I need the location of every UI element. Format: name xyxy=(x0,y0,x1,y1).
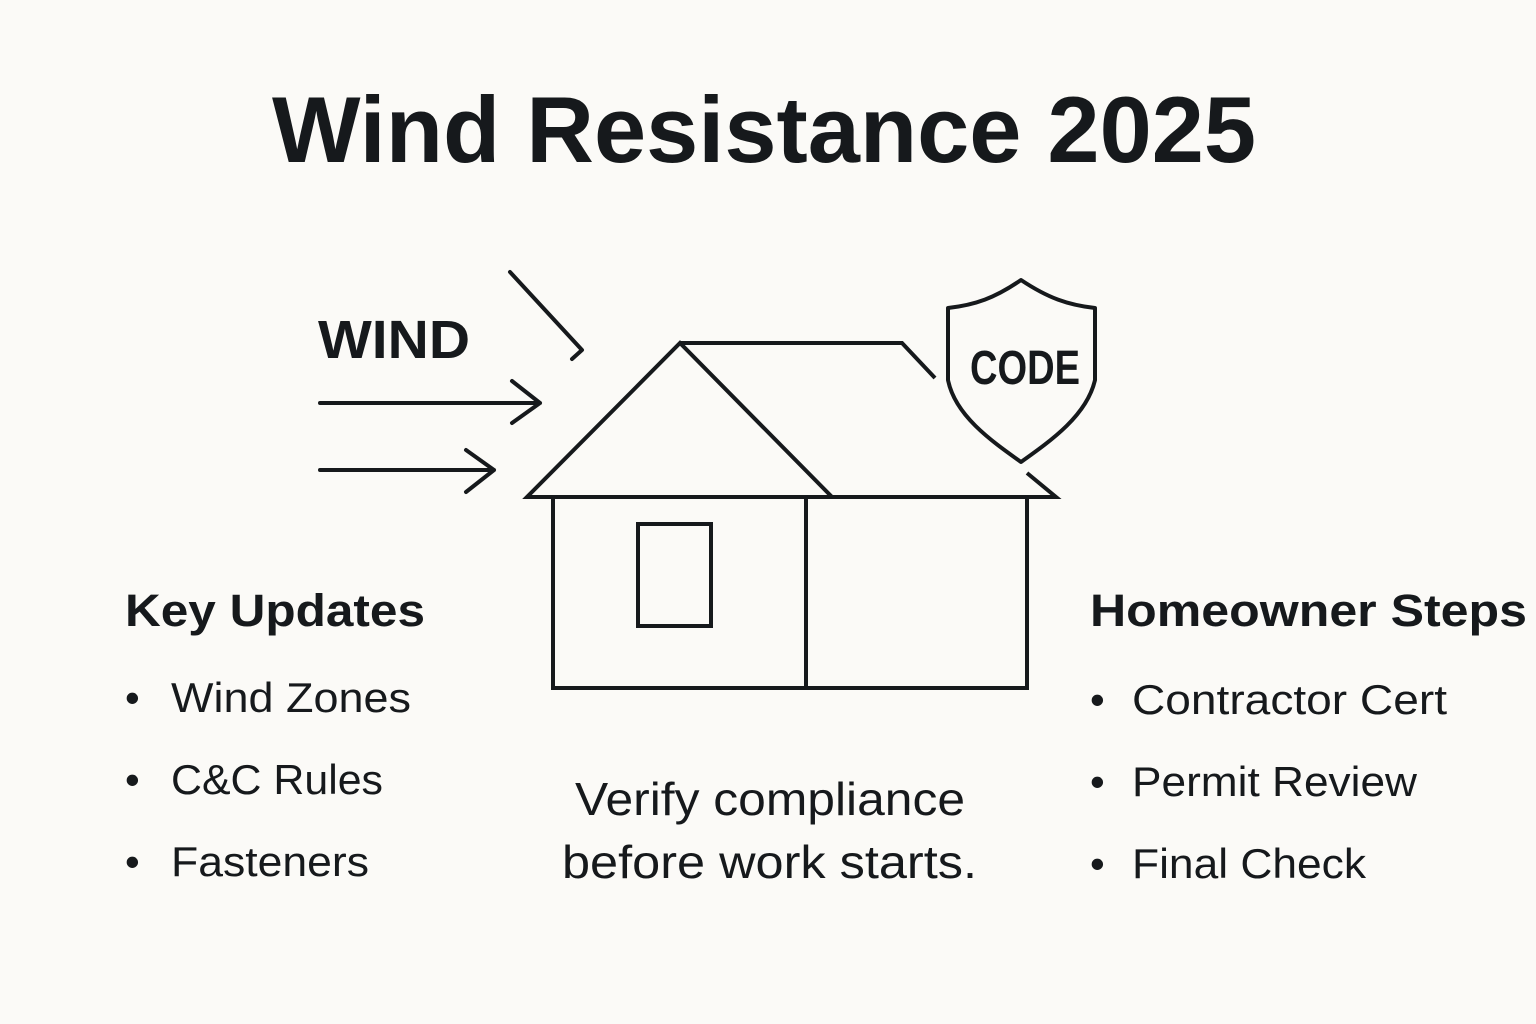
panel: key updates: Fasteners xyxy=(171,838,369,885)
title: Wind Resistance 2025 xyxy=(272,77,1256,182)
panel: homeowner steps: Permit Review xyxy=(1132,758,1418,805)
center text: Verify compliance xyxy=(575,773,965,825)
panel: homeowner steps: • xyxy=(1090,676,1105,723)
icon: code shield xyxy=(948,280,1095,462)
panel: homeowner steps xyxy=(1090,585,1527,887)
panel: homeowner steps: Homeowner Steps xyxy=(1090,585,1527,636)
wind label: WIND xyxy=(318,310,470,370)
panel: key updates: • xyxy=(125,756,140,803)
panel: key updates: C&C Rules xyxy=(171,756,383,803)
panel: key updates xyxy=(125,585,425,885)
house xyxy=(527,343,1056,688)
panel: homeowner steps: • xyxy=(1090,758,1105,805)
panel: homeowner steps: • xyxy=(1090,840,1105,887)
panel: homeowner steps: Final Check xyxy=(1132,840,1367,887)
wind arrows xyxy=(320,272,582,492)
panel: key updates: Key Updates xyxy=(125,585,425,636)
center text: before work starts. xyxy=(562,836,977,888)
panel: homeowner steps: Contractor Cert xyxy=(1132,676,1447,723)
panel: key updates: • xyxy=(125,674,140,721)
center text xyxy=(562,773,977,888)
panel: key updates: Wind Zones xyxy=(171,674,411,721)
panel: key updates: • xyxy=(125,838,140,885)
window xyxy=(638,524,711,626)
icon: code shield: CODE xyxy=(970,342,1080,395)
